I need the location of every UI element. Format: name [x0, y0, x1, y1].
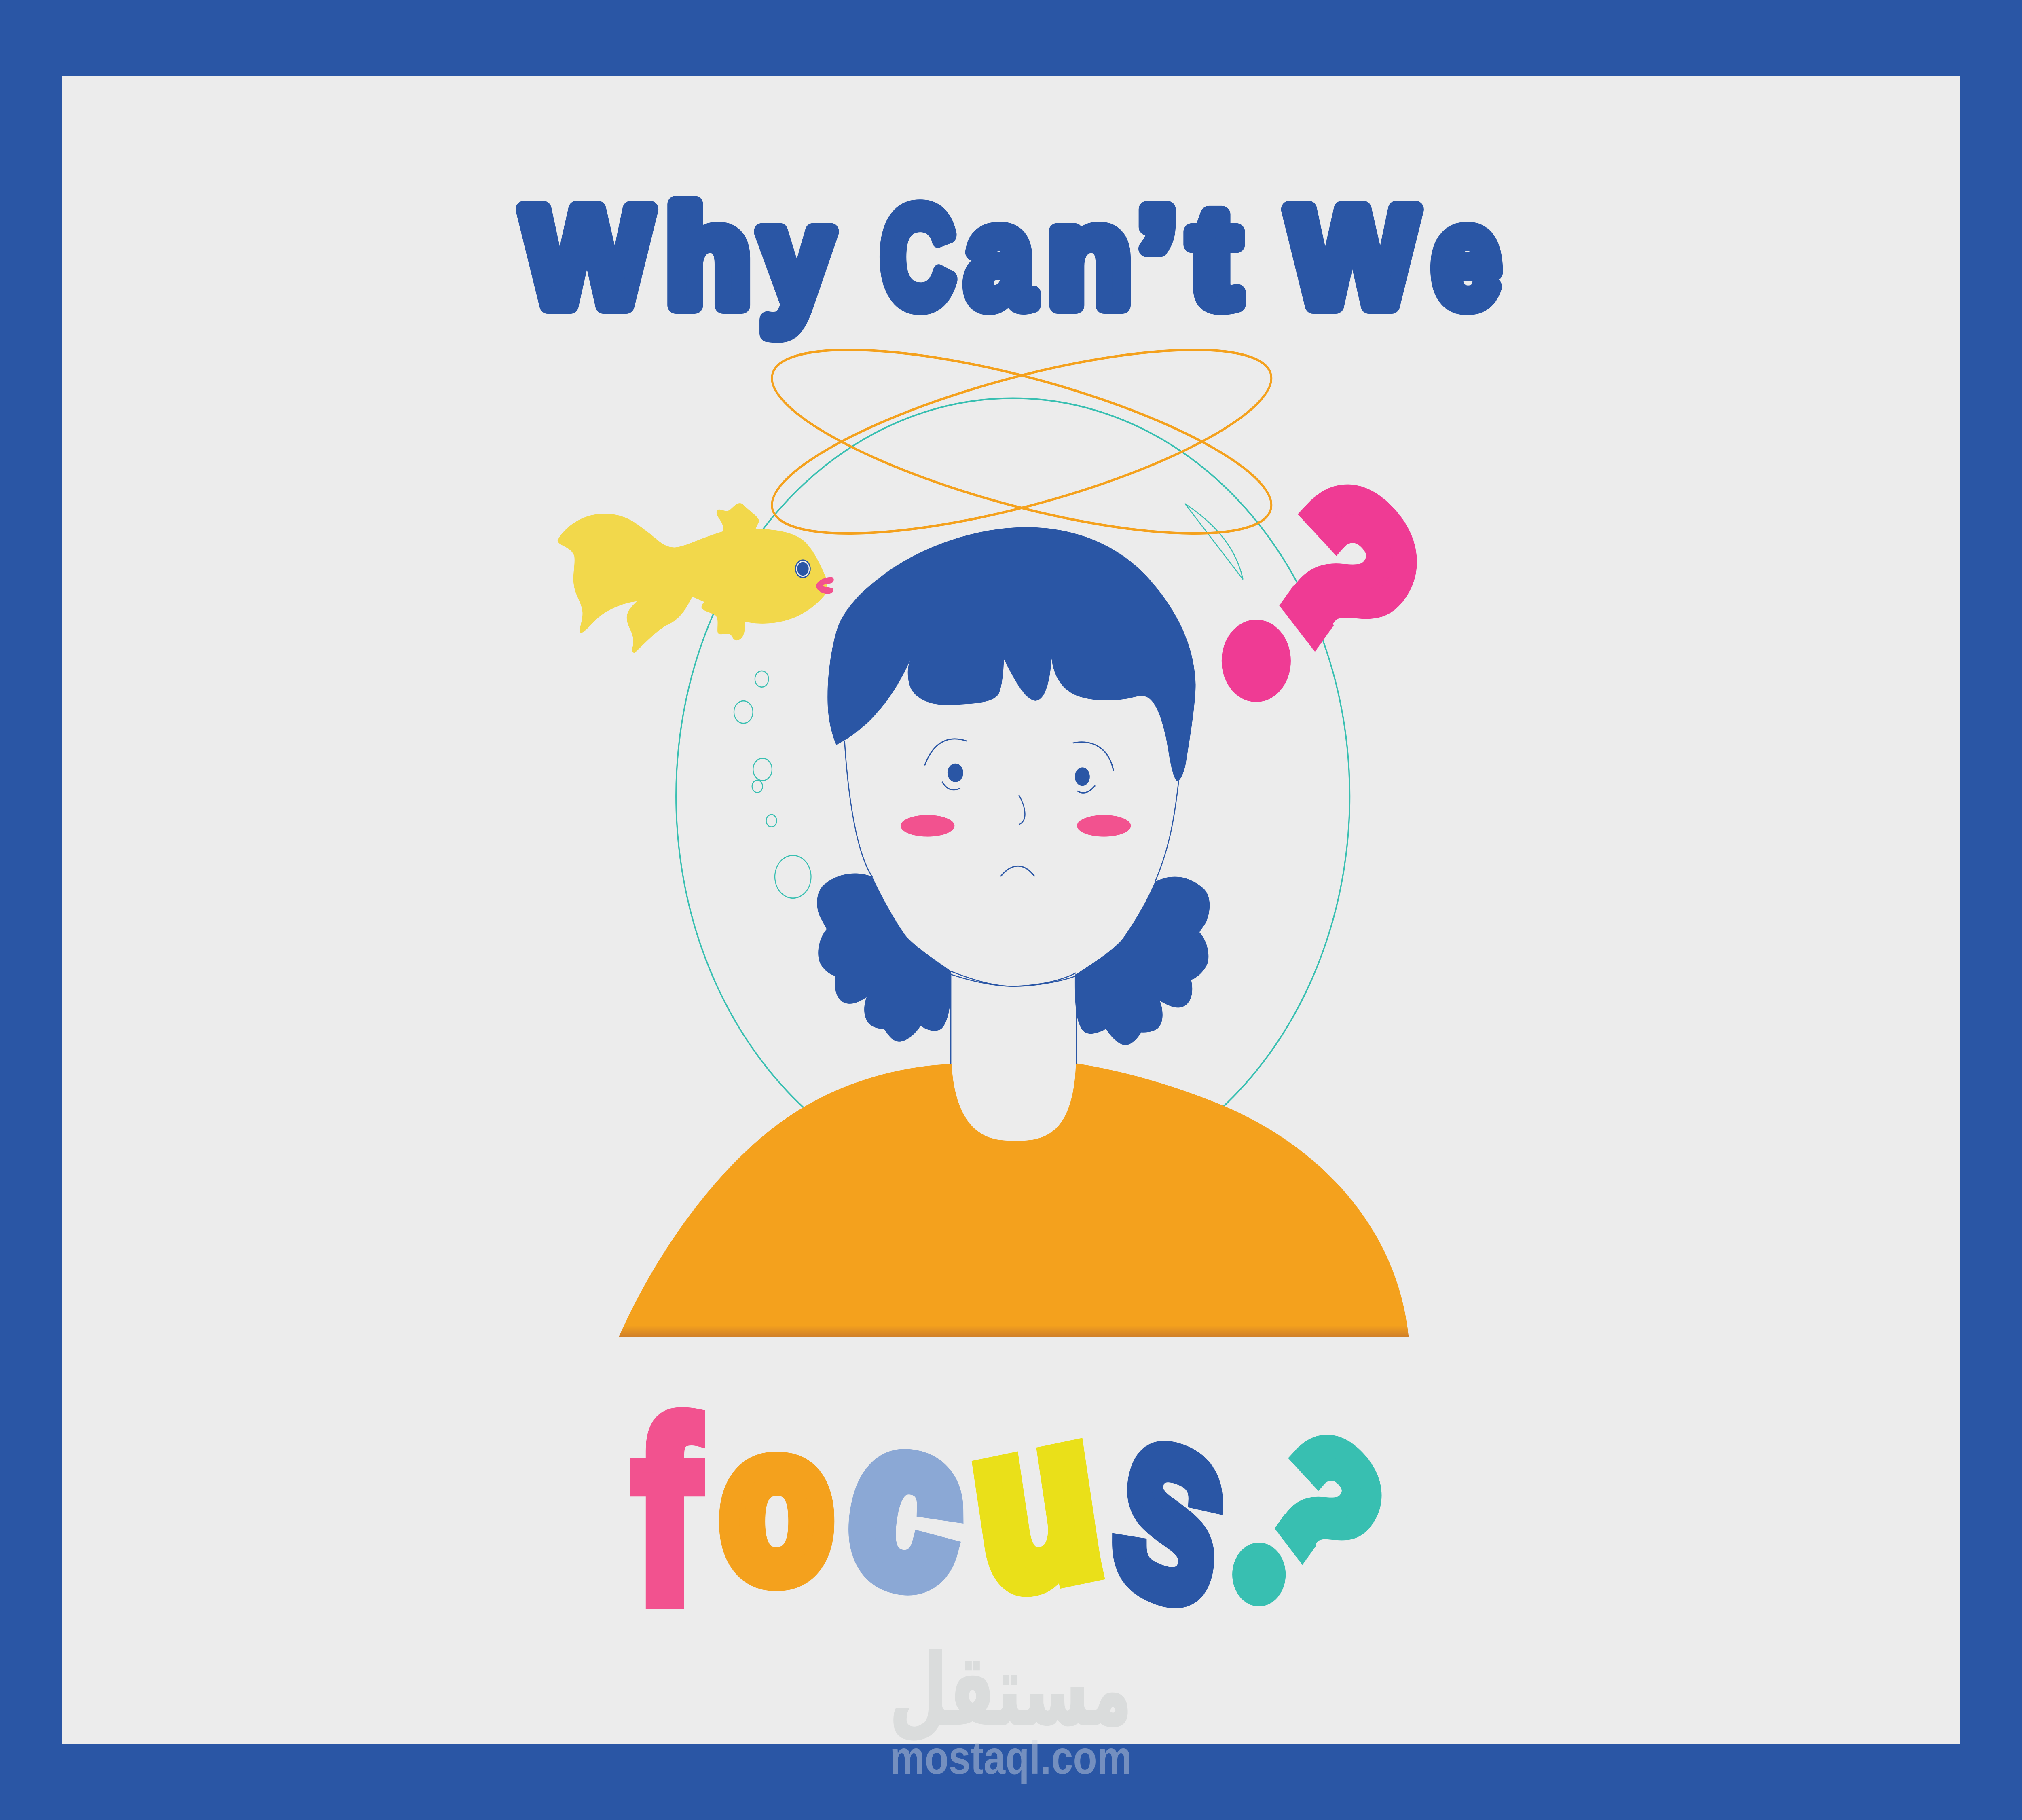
fishbowl circle — [676, 398, 1350, 1194]
heading: focus? — [632, 1337, 1413, 1662]
title: y — [761, 179, 833, 336]
cheeks — [901, 815, 1131, 837]
pink question mark — [1221, 485, 1417, 702]
title: e — [1433, 179, 1500, 335]
watermark: arabic logo: مستقل — [890, 1634, 1132, 1747]
orange dizzy orbits — [760, 312, 1283, 571]
nose — [1019, 795, 1025, 825]
fish lips — [816, 577, 834, 594]
heading: focus?: c — [837, 1371, 977, 1637]
fish body — [558, 503, 827, 653]
goldfish — [558, 503, 834, 898]
heading: focus?: s — [1092, 1337, 1261, 1662]
hair: left tuft — [817, 873, 951, 1042]
title: W — [524, 179, 651, 335]
bowl highlight — [1185, 504, 1243, 579]
title: W — [1289, 179, 1417, 335]
fish eye — [795, 559, 811, 578]
heading: focus?: f — [632, 1367, 701, 1657]
title: h — [666, 179, 751, 335]
heading: focus?: ? — [1225, 1393, 1413, 1627]
title: n — [1048, 179, 1131, 335]
title: ’ — [1138, 179, 1177, 335]
pink question mark: ? — [1217, 431, 1457, 729]
teal question mark dot — [1232, 1543, 1286, 1606]
hair: right tuft — [1075, 877, 1210, 1045]
eyes — [948, 764, 1090, 786]
watermark: url: mostaql.com — [890, 1731, 1132, 1784]
character head — [817, 527, 1210, 1064]
bubbles — [734, 671, 811, 898]
heading: focus?: o — [722, 1387, 831, 1622]
orange shirt — [619, 1063, 1409, 1337]
title: t — [1191, 179, 1239, 335]
frowning mouth — [1000, 866, 1034, 876]
hair: fringe — [827, 527, 1196, 781]
title: a — [966, 179, 1034, 335]
face and neck outlines — [844, 741, 1178, 1064]
eyebrows and eye creases — [924, 739, 1113, 793]
heading: focus?: u — [959, 1365, 1112, 1638]
title: C — [882, 179, 954, 335]
